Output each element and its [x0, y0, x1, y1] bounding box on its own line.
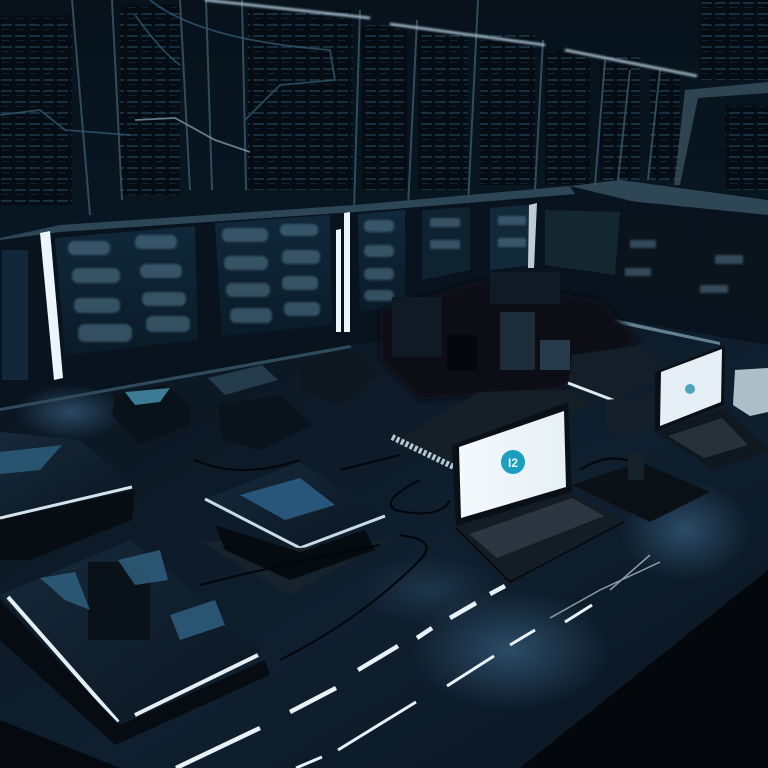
main laptop [452, 402, 624, 582]
tablet: centre [198, 462, 388, 595]
tablet: large bottom left [0, 540, 270, 745]
cables on wall [0, 0, 335, 152]
dark stand beside laptop [572, 452, 710, 522]
laptop logo [501, 450, 525, 474]
panel: right modules [545, 210, 620, 275]
cables on table [195, 455, 640, 660]
centre equipment cluster [300, 272, 668, 470]
laptop keyboard [456, 493, 624, 582]
right edge white box [733, 368, 768, 416]
module rows [68, 216, 743, 342]
panel: middle modules [215, 215, 332, 336]
wall panel band [0, 195, 768, 408]
rack vertical posts [72, 0, 660, 215]
overhead light bars [205, 0, 697, 76]
tablet: left [0, 432, 135, 560]
laptop logo: I2 [508, 456, 518, 470]
panel: left modules [55, 226, 198, 355]
dashed white lines on table [176, 555, 660, 768]
second laptop [655, 345, 768, 470]
right glass shelf [570, 82, 768, 216]
table surface [0, 316, 768, 768]
upper shelf rail [0, 186, 575, 242]
laptop screen [459, 411, 566, 518]
panel: centre modules [358, 210, 405, 312]
left dim modules [2, 250, 28, 380]
light strips [40, 203, 537, 380]
bottom front vignette [0, 720, 120, 768]
small devices on the table [112, 365, 660, 450]
